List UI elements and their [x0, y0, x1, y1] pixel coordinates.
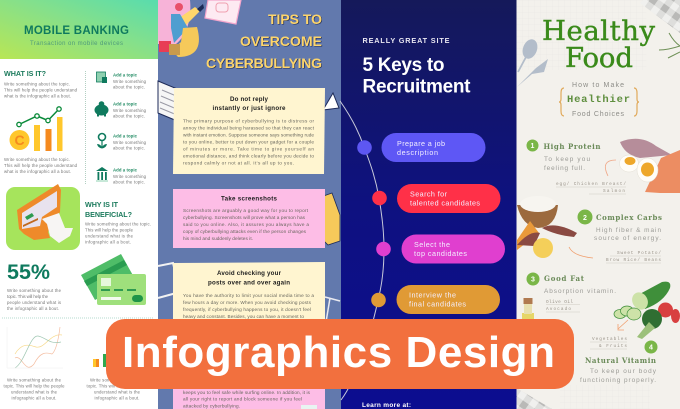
subtitle: Healthier [567, 94, 630, 106]
icon: spoon and fork [517, 37, 548, 87]
text: second paragraph: This will help the people understand [4, 163, 78, 168]
decoration: bottom corner icon [301, 405, 317, 409]
note: avoid checking: frequently, if cyberbullying happens to you, it doesn't feel [183, 307, 311, 312]
decoration: checked cloth bottom [516, 388, 552, 409]
item 2: complex carbs: High fiber & main [596, 227, 661, 234]
food: meat, eggs and salmon [605, 139, 680, 193]
icon: credit cards [81, 254, 146, 305]
line chart [7, 327, 63, 368]
illustration: payment terminal on green card [6, 184, 80, 250]
illustration: figure on pink shape [158, 0, 204, 57]
note: avoid checking: few hours a day or more. When you avoid checking posts [183, 300, 312, 305]
topic 1 [96, 72, 147, 90]
section: what is it: WHAT IS IT? [4, 69, 46, 78]
text: line chart caption [4, 378, 65, 400]
text: bar chart caption: topic. This will help the people [86, 384, 148, 388]
section: why is it beneficial [85, 200, 151, 244]
title: TIPS TO [268, 11, 322, 27]
chart icon: coin and bars: C [14, 132, 25, 148]
note: take screenshots [173, 189, 325, 248]
note: do not reply: respond calmly or not at all. It's all up to you. [183, 160, 294, 166]
note: do not reply: The primary purpose of cyberbullying is to distress or [183, 118, 314, 124]
note: avoid checking: posts over and over again [208, 280, 290, 286]
topic 3: Write something [113, 140, 147, 145]
topic 2 [94, 101, 147, 118]
text: line chart caption: understand what is the [11, 390, 58, 394]
stat: 55 percent: 55% [7, 260, 50, 284]
decoration: photo frame [158, 263, 180, 298]
text: second paragraph [4, 157, 78, 174]
header band [0, 0, 159, 59]
step 1: Prepare a job [397, 139, 445, 148]
note: do not reply: instantly or just ignore [212, 105, 286, 112]
item 1: high protein: feeling full. [544, 165, 585, 172]
item 3: good fat [526, 272, 616, 312]
item 2: complex carbs: Complex Carbs [596, 213, 662, 222]
decoration: warning triangle [323, 93, 339, 110]
title [542, 15, 655, 74]
note: do not reply: to you online, better to put down your gadget for a couple [183, 140, 314, 144]
note: report and block: attacked by cyberbullying. [183, 403, 240, 408]
note: report and block: all your right to report and block someone if you feel [183, 396, 302, 402]
topic 2: about the topic. [113, 114, 145, 118]
note: take screenshots: his mind and suddenly deletes it. [183, 236, 253, 241]
item 3: good fat: Avocado [546, 307, 571, 312]
section: why is it beneficial: infographic all a bout. [85, 240, 131, 244]
title: OVERCOME [240, 33, 322, 49]
section: why is it beneficial: understand what is the [85, 234, 134, 238]
timeline curve [340, 101, 384, 400]
step 4: final candidates [409, 300, 466, 308]
heading: 5 Keys to [362, 55, 444, 76]
header band: MOBILE BANKING [24, 25, 129, 37]
text: bar chart caption: understand what is the [94, 390, 141, 394]
decoration: paper sheet [158, 81, 187, 123]
note: avoid checking: You have the authority to limit your social media time to a [183, 293, 314, 298]
note: avoid checking [173, 262, 325, 330]
topic 2: Add a topic [113, 102, 138, 106]
subtitle [559, 82, 639, 118]
section: why is it beneficial: This will help the people [85, 228, 134, 232]
icon: notification card [205, 0, 241, 24]
text: line chart caption: topic. This will help the people [4, 384, 65, 388]
banner: infographics design: Infographics Design [122, 328, 555, 377]
heading: REALLY GREAT SITE [362, 36, 450, 45]
item 4: natural vitamin: To keep our body [590, 368, 657, 375]
step 2: Search for [410, 190, 448, 198]
note: do not reply: Do not reply [230, 96, 269, 103]
section: what is it [4, 69, 78, 98]
stat: 55 percent: topic. This will help the [7, 294, 49, 299]
item 2: complex carbs [578, 210, 662, 263]
decoration: yellow sticky note [315, 193, 340, 245]
note: take screenshots: copy of cyberbullying attacks even if the person changes [183, 229, 307, 234]
decoration: rosemary [659, 33, 680, 58]
stat: 55 percent [7, 260, 62, 311]
note: take screenshots: said to you online. Also, it assures you always have a [183, 222, 309, 227]
text: bar chart caption [86, 378, 148, 400]
step 2 [372, 184, 500, 213]
note: do not reply: annoy the individual being harassed so that they can react [183, 126, 315, 130]
panel: healthy food [516, 0, 680, 409]
topic 1: Add a topic [113, 72, 138, 78]
section: what is it: Write something about the topic. [4, 82, 70, 86]
item 3: good fat: Absorption vitamin. [544, 288, 616, 295]
panel: recruitment [340, 0, 516, 409]
panel: mobile banking [0, 0, 159, 409]
stat: 55 percent: people understand what is [7, 300, 61, 305]
section: what is it: This will help the people understand [4, 88, 78, 92]
item 4: natural vitamin: & Fruits [599, 344, 627, 349]
note: avoid checking: heavy and constant. Besides, you can have a moment to [183, 314, 304, 319]
icon: oil bottle [522, 298, 534, 338]
step 4 [371, 285, 500, 314]
topic 4: Write something [113, 174, 147, 179]
item 1: high protein: To keep you [544, 156, 590, 163]
note: take screenshots: cyberbullying. Screenshots will prove what a person has [183, 215, 306, 220]
item 2: complex carbs: source of energy. [594, 235, 661, 242]
note: take screenshots: Take screenshots [221, 196, 278, 202]
item 2: complex carbs: 2 [583, 215, 587, 222]
topic 4: Add a topic [113, 168, 138, 172]
text: line chart caption: infographic all a bout. [12, 396, 56, 400]
topic 4: about the topic. [113, 180, 145, 184]
topic list [94, 72, 147, 184]
title: CYBERBULLYING [206, 55, 322, 71]
topic 3 [97, 134, 147, 150]
item 2: complex carbs: Sweet Potato/ [617, 251, 661, 256]
title: OVERCOME [241, 34, 323, 50]
step 3: top candidates [414, 249, 467, 258]
item 1: high protein: High Protein [544, 142, 600, 151]
section: why is it beneficial: BENEFICIAL? [85, 210, 132, 219]
step 3 [376, 234, 505, 264]
item 4: natural vitamin: Vegetables [592, 337, 627, 342]
chart icon: coin and bars [10, 107, 62, 151]
item 1: high protein [526, 140, 626, 194]
item 3: good fat: Olive Oil [546, 300, 573, 305]
text: bar chart caption: infographic all a bout. [94, 396, 140, 400]
step 3: Select the [414, 240, 450, 249]
note: report and block: keeps you to feel safe while surfing online. In addition, it is [183, 390, 311, 395]
heading: Recruitment [362, 76, 471, 98]
step 2: talented candidates [410, 198, 480, 208]
item 2: complex carbs: Brow Rice/ Beans [606, 258, 661, 263]
note: do not reply: with instant emotion. Suppose someone says something rude [183, 132, 314, 138]
text: second paragraph: Write something about the topic. [4, 157, 70, 162]
item 3: good fat: Good Fat [544, 274, 585, 283]
header band: Transaction on mobile devices [30, 41, 123, 47]
footer text: Learn more at: [362, 402, 411, 409]
decoration: right photo frame [325, 297, 340, 322]
panel: cyberbullying tips [158, 0, 341, 409]
note: do not reply: emotional distance, and think clearly before you decide to [183, 154, 314, 158]
item 1: high protein: 1 [531, 143, 535, 150]
text: bar chart caption: Write something about the [90, 378, 145, 382]
topic 1: Write something [113, 79, 147, 84]
decoration: checked cloth top [640, 0, 680, 33]
bar chart [93, 354, 106, 367]
subtitle: Food Choices [572, 111, 624, 118]
title: TIPS TO [269, 12, 323, 28]
item 3: good fat: 3 [531, 276, 535, 284]
item 4: natural vitamin: Natural Vitamin [585, 356, 656, 365]
step 1: description [397, 148, 438, 157]
item 1: high protein: Salmon [603, 189, 625, 194]
food: cucumber, broccoli, strawberry [614, 282, 680, 339]
item 4: natural vitamin: 4 [649, 344, 653, 352]
banner: infographics design [106, 319, 574, 389]
stat: 55 percent: the infographic all a bout. [7, 306, 59, 311]
note: report and block [173, 375, 325, 409]
item 4: natural vitamin: functioning properly. [580, 377, 656, 384]
title [206, 11, 323, 72]
section: what is it: what is the infographic all a bout. [4, 94, 71, 98]
note: take screenshots: Screenshots are arguably a good way for you to report [183, 208, 309, 213]
topic 3: Add a topic [113, 134, 138, 138]
subtitle: How to Make [572, 82, 624, 89]
topic 1: about the topic. [113, 84, 145, 90]
text: second paragraph: what is the infographic all a bout. [4, 169, 71, 174]
topic 4 [96, 167, 147, 184]
stat: 55 percent: Write something about the [7, 288, 62, 293]
note: do not reply [173, 88, 325, 174]
item 1: high protein: egg/ Chicken Breast/ [556, 182, 626, 187]
heading [362, 36, 471, 98]
section: why is it beneficial: WHY IS IT [85, 200, 119, 209]
topic 3: about the topic. [113, 146, 145, 150]
topic 2: Write something [113, 108, 147, 113]
title: CYBERBULLYING [207, 56, 323, 72]
title: Food [565, 42, 633, 74]
title: Healthy [542, 15, 655, 47]
text: line chart caption: Write something about the [7, 378, 62, 382]
step 4: Interview the [409, 290, 456, 300]
food: rice bowl and sweet potato [517, 196, 593, 258]
note: avoid checking: Avoid checking your [217, 270, 282, 277]
step 1 [357, 133, 486, 162]
note: do not reply: of minutes or more. Take time to give yourself an [183, 146, 314, 152]
item 4: natural vitamin [580, 337, 658, 384]
section: why is it beneficial: Write something about the topic. [85, 222, 151, 226]
